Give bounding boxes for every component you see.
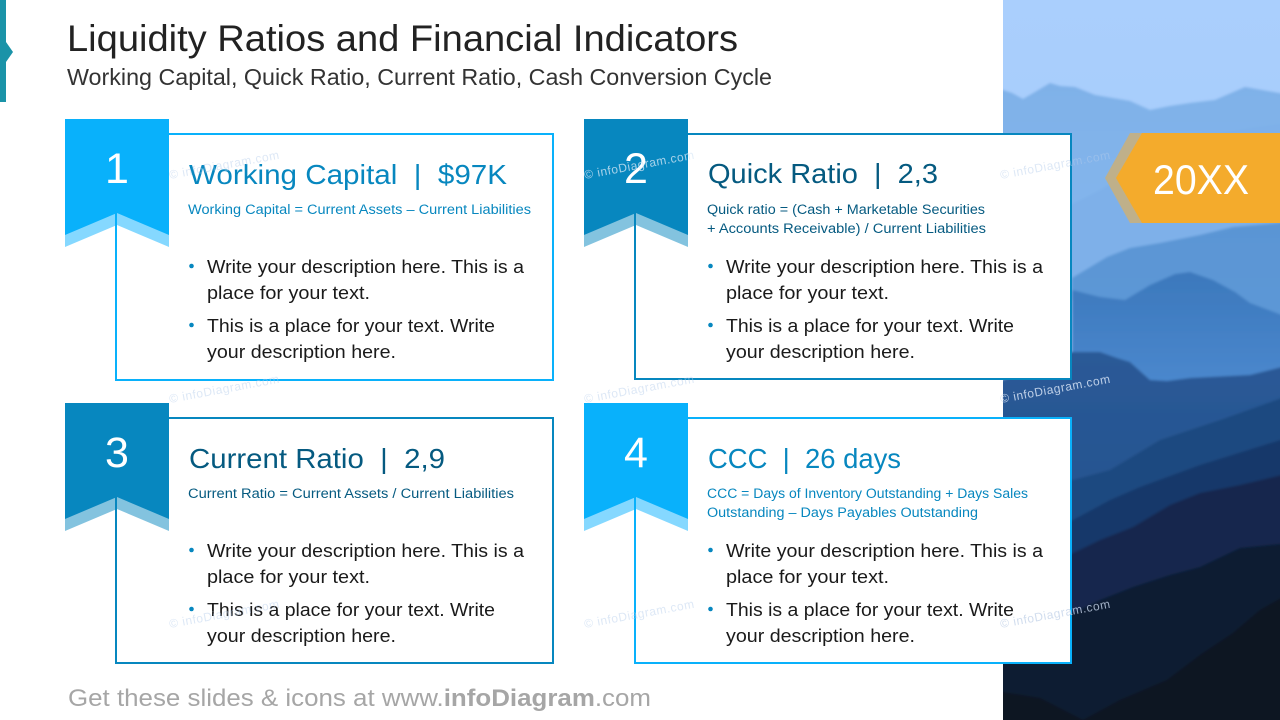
bullet list: place for your text. <box>207 566 370 587</box>
bullet list <box>189 256 525 362</box>
watermarks: © infoDiagram.com <box>583 372 696 406</box>
tab marker <box>0 0 13 102</box>
watermarks: © infoDiagram.com <box>999 597 1112 631</box>
year tag: 20XX <box>1153 156 1249 203</box>
formula <box>707 202 986 236</box>
ribbon 1 <box>65 119 169 253</box>
formula <box>707 486 1028 520</box>
watermarks: © infoDiagram.com <box>168 148 281 182</box>
bullet list: This is a place for your text. Write <box>207 315 495 336</box>
panel: mountain photo <box>990 0 1280 720</box>
bullet list: This is a place for your text. Write <box>207 599 495 620</box>
formula: CCC = Days of Inventory Outstanding + Days Sales <box>707 486 1028 501</box>
watermarks: © infoDiagram.com <box>168 372 281 406</box>
footer: Get these slides & icons at www. infoDiagram .com <box>68 685 651 712</box>
bullet list: Write your description here. This is a <box>207 540 525 561</box>
heading: Working Capital | $97K <box>189 159 508 190</box>
bullet list: your description here. <box>207 625 396 646</box>
title: Liquidity Ratios and Financial Indicators <box>67 18 738 59</box>
card border <box>635 418 1071 663</box>
bullet list <box>708 540 1044 646</box>
heading: Current Ratio | 2,9 <box>189 443 445 474</box>
formula: Outstanding – Days Payables Outstanding <box>707 505 978 520</box>
watermarks: © infoDiagram.com <box>583 148 696 182</box>
bullet list: This is a place for your text. Write <box>726 599 1014 620</box>
formula: Current Ratio = Current Assets / Current Liabilities <box>188 486 514 501</box>
watermarks: © infoDiagram.com <box>999 148 1112 182</box>
watermarks: © infoDiagram.com <box>583 597 696 631</box>
bullet list: your description here. <box>726 625 915 646</box>
bullet list: your description here. <box>207 341 396 362</box>
heading: Quick Ratio | 2,3 <box>708 158 938 189</box>
ribbon 1: 1 <box>105 145 129 193</box>
ribbon 4: 4 <box>624 429 648 477</box>
bullet list: place for your text. <box>726 282 889 303</box>
bullet list: place for your text. <box>207 282 370 303</box>
bullet list <box>189 540 525 646</box>
bullet list: your description here. <box>726 341 915 362</box>
heading: CCC | 26 days <box>708 443 901 474</box>
formula: Quick ratio = (Cash + Marketable Securities <box>707 202 985 217</box>
card border <box>116 418 553 663</box>
panel: 4 ccc <box>584 403 1071 663</box>
ribbon 3 <box>65 403 169 537</box>
card border <box>635 134 1071 379</box>
subtitle: Working Capital, Quick Ratio, Current Ratio, Cash Conversion Cycle <box>67 64 772 90</box>
card border <box>116 134 553 380</box>
year tag <box>1105 133 1280 223</box>
bullet list: Write your description here. This is a <box>726 540 1044 561</box>
formula: Working Capital = Current Assets – Current Liabilities <box>188 202 531 217</box>
ribbon 4 <box>584 403 688 537</box>
panel: 3 current ratio <box>65 403 553 663</box>
watermarks: © infoDiagram.com <box>168 597 281 631</box>
ribbon 3: 3 <box>105 429 129 477</box>
watermarks <box>168 148 1112 631</box>
watermarks: © infoDiagram.com <box>999 372 1112 406</box>
bullet list <box>708 256 1044 362</box>
formula: + Accounts Receivable) / Current Liabilities <box>707 221 986 236</box>
ribbon 2: 2 <box>624 145 648 193</box>
bullet list: place for your text. <box>726 566 889 587</box>
panel: 2 quick ratio <box>584 119 1071 379</box>
bullet list: This is a place for your text. Write <box>726 315 1014 336</box>
bullet list: Write your description here. This is a <box>726 256 1044 277</box>
ribbon 2 <box>584 119 688 253</box>
panel: 1 working capital <box>65 119 553 380</box>
bullet list: Write your description here. This is a <box>207 256 525 277</box>
